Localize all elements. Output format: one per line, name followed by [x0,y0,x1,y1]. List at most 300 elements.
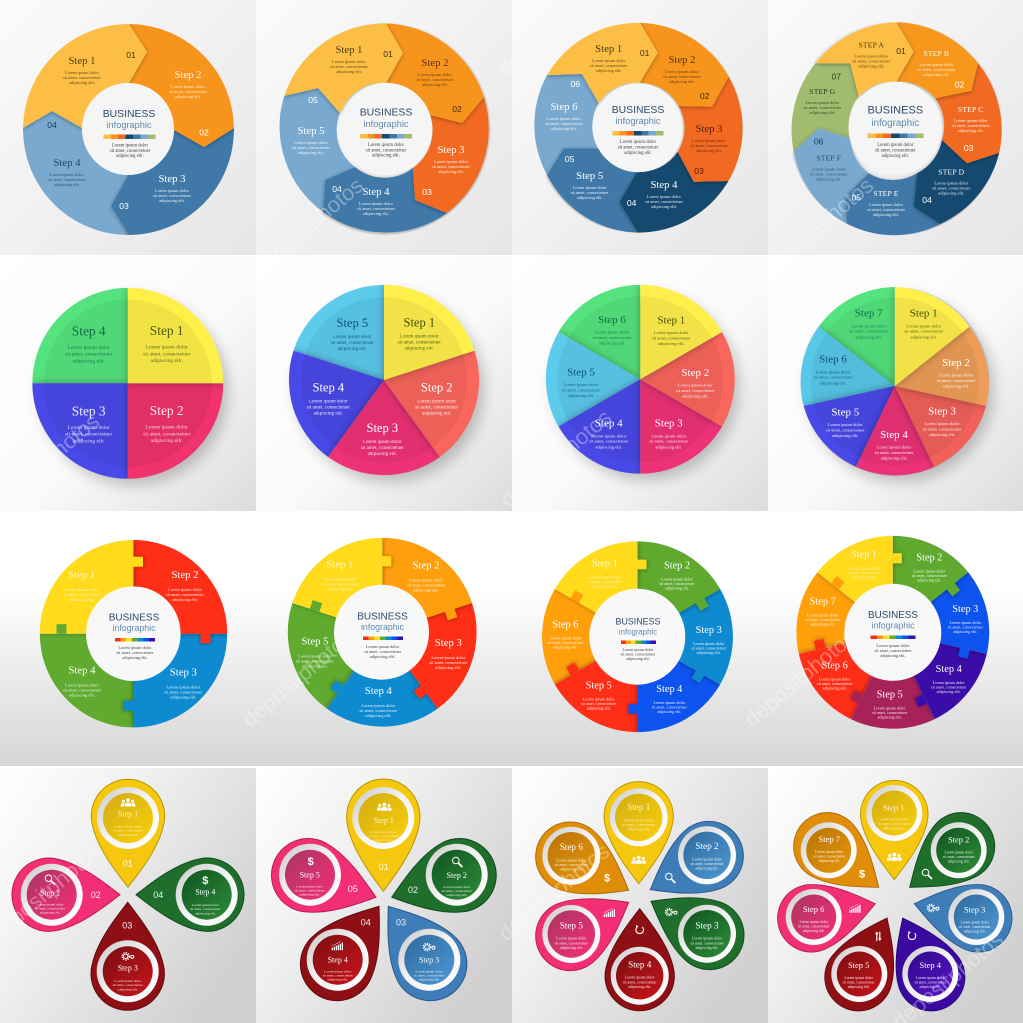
ring [611,947,669,1005]
step 1 label: Step 1 [335,44,363,56]
pin body [359,885,481,1015]
panel: wheel with four arrow steps [0,0,256,255]
step text: Lorem ipsum dolor [192,903,220,907]
petal: step 1 [861,780,928,880]
step text [35,888,66,914]
step 4 label: sit amet, consectetuer [645,199,683,205]
segment: step C [935,63,1002,163]
step 5 label [331,316,374,352]
step 2 label [166,569,204,602]
center text [116,645,154,660]
step 4 label [63,664,101,697]
icon: people [121,798,135,806]
step 1 label: Step 1 [403,316,435,330]
pin body [380,829,506,932]
center subheading: infographic [361,622,405,632]
step 1 label: Lorem ipsum dolor [332,59,366,64]
step text: Step 4 [920,960,942,970]
step 1 label [143,323,191,364]
step text [690,841,724,871]
step 7 label: sit amet, consectetuer [805,617,841,623]
step 5 label: sit amet, consectetuer [571,190,609,196]
piece: step 3 [638,589,762,708]
step text: Lorem ipsum dolor [879,818,909,822]
petal: step 3 [907,871,1019,959]
inner shade [811,298,979,466]
step 1 label [904,308,944,339]
step 2 label: Lorem ipsum dolor [665,69,699,74]
step text: Step 6 [560,842,583,852]
step 6 label: adipiscing elit. [599,341,625,346]
step 2 label: adipiscing elit. [413,588,439,593]
step 1 label: Lorem ipsum dolor [848,565,880,570]
center text: sit amet, consectetuer [874,648,912,654]
inner shade [301,297,467,463]
step 2 label: adipiscing elit. [665,586,689,591]
step 2 label [407,560,445,593]
step 1 label: Lorem ipsum dolor [589,574,621,579]
step 6 label: sit amet, consectetuer [814,375,853,381]
ring [542,905,600,963]
step text [369,816,400,842]
step 3 label [429,637,468,670]
step 1 label: Step 1 [595,43,622,55]
segment: step G [792,63,859,152]
step 4 label: Step 4 [53,157,81,169]
disc [103,793,153,843]
pin body [347,779,420,891]
step E label: sit amet, consectetuer [867,207,905,213]
step 4 label [875,429,914,461]
step 2 label: adipiscing elit. [422,412,451,417]
sector: step 3 [32,383,128,479]
sector: step 6 [558,261,681,379]
panel background [0,0,256,255]
step text: adipiscing elit. [373,838,394,842]
step text: sit amet, consectetuer [843,980,875,986]
step 1 label: adipiscing elit. [405,347,434,352]
step text: Lorem ipsum dolor [916,976,945,980]
step text: Step 3 [118,964,138,973]
step D label: sit amet, consectetuer [932,186,971,192]
petal: step 4 [605,909,674,1011]
ring [866,785,922,841]
piece: step 6 [783,600,893,719]
step 6 label: Step 6 [819,354,847,366]
step text [113,809,144,837]
step text: sit amet, consectetuer [35,906,66,911]
segment: step E [845,173,940,235]
step C label: sit amet, consectetuer [952,123,990,129]
panel: petal pins with five steps [256,768,512,1023]
step 3 label: Step 3 [952,604,978,615]
step 5 label [562,366,601,398]
step 6 label: adipiscing elit. [820,380,846,385]
step B label: adipiscing elit. [923,72,949,77]
disc [954,894,999,940]
step text: sit amet, consectetuer [622,823,656,828]
step A label: STEP A [858,41,884,50]
step text: Lorem ipsum dolor [844,976,874,980]
segment: step 1 [547,23,658,103]
step 4 label [357,186,395,216]
step text [959,904,991,933]
step 6 label [814,354,853,385]
piece: step 3 [382,603,500,718]
step 4 label: Step 4 [650,179,678,191]
step 6 label: Lorem ipsum dolor [816,369,851,374]
puzzle ring pieces [40,540,227,728]
step text: sit amet, consectetuer [414,973,445,978]
step text: Lorem ipsum dolor [624,818,654,822]
numbers: 03 [964,143,974,153]
step 6 label: Step 6 [822,661,848,672]
pin body [907,871,1019,959]
step 6 label [817,661,853,691]
step 2 label [912,552,948,582]
pie shadow [553,294,739,480]
step 1 label: sit amet, consectetuer [321,581,359,587]
step text: sit amet, consectetuer [554,863,589,868]
sector: step 5 [804,386,895,467]
center text: adipiscing elit. [372,154,400,158]
step 1 label: sit amet, consectetuer [590,63,628,69]
step text: sit amet, consectetuer [878,822,910,827]
panel: wheel with seven arrow steps [768,0,1023,255]
piece: step 3 [893,572,1015,691]
center text [110,144,151,159]
step text: Lorem ipsum dolor [415,969,443,973]
step 2 label: sit amet, consectetuer [663,74,701,80]
step 7 label: adipiscing elit. [855,334,882,339]
step 2 label [143,403,191,444]
step 7 label: Step 7 [855,308,883,320]
number: 02 [408,885,418,895]
step 6 label: Lorem ipsum dolor [819,677,851,682]
step 1 label: sit amet, consectetuer [652,335,691,341]
step 2 label: Step 2 [681,367,709,379]
step text: Lorem ipsum dolor [114,824,142,828]
step text: Step 1 [883,803,904,813]
step 3 label: Lorem ipsum dolor [166,684,201,689]
step text [295,870,326,896]
icon: chart [604,908,615,917]
icon: magnifier [45,875,55,885]
step 5 label: sit amet, consectetuer [872,710,908,716]
step 4 label: adipiscing elit. [314,412,343,417]
step 7 label: Step 7 [810,597,836,608]
piece: step 2 [382,538,472,632]
step 2 label: Lorem ipsum dolor [913,568,946,573]
step 4 label: adipiscing elit. [54,182,80,187]
step 4 label [589,418,629,449]
step 4 label: Lorem ipsum dolor [933,680,965,685]
piece: step 2 [638,541,720,637]
step 3 label: sit amet, consectetuer [65,432,113,438]
sector: step 5 [518,308,640,427]
step G label: STEP G [809,87,836,96]
step 3 label: Step 3 [437,144,465,156]
step 3 label: Step 3 [366,421,398,435]
ring [542,827,600,885]
step 7 label [849,308,889,339]
panel background [512,0,768,255]
pin body [780,799,900,914]
step C label: Lorem ipsum dolor [954,118,988,123]
step 4 label: sit amet, consectetuer [307,406,350,411]
step 5 label: Step 5 [576,170,603,182]
center text: adipiscing elit. [116,154,144,159]
ring [97,940,159,1002]
step 3 label [361,421,404,457]
step 6 label: Step 6 [550,101,578,113]
sector: step 1 [640,285,722,379]
step B label: sit amet, consectetuer [917,67,956,73]
step text: Step 4 [195,888,215,897]
petal: step 4 [286,885,409,1015]
pin body [12,858,120,931]
step 3 label: adipiscing elit. [435,665,461,670]
disc [683,832,731,879]
piece: step 1 [292,517,410,632]
step 2 label: Lorem ipsum dolor [171,84,205,89]
step 3 label [690,123,728,153]
step 3 label: Step 3 [695,123,723,135]
step 3 label: Step 3 [72,403,106,418]
step 2 label: sit amet, consectetuer [143,431,191,437]
step 3 label: Lorem ipsum dolor [949,620,982,625]
step text: Lorem ipsum dolor [370,830,398,834]
step 4 label: Lorem ipsum dolor [359,201,393,206]
numbers: 06 [571,79,580,89]
step 1 label [652,314,691,346]
step text: Step 3 [964,904,985,914]
pie shadow [296,294,484,482]
step 3 label: Step 3 [655,418,683,430]
step 6 label: adipiscing elit. [551,126,577,131]
segment: step 4 [23,111,129,235]
step 4 label: Lorem ipsum dolor [67,345,110,351]
step text: adipiscing elit. [628,985,651,989]
number: 02 [91,890,101,900]
step 1 label: sit amet, consectetuer [63,75,101,81]
step 4 label: Lorem ipsum dolor [591,433,627,438]
step 3 label: sit amet, consectetuer [649,439,689,445]
numbers: 01 [126,50,136,60]
step 1 label: adipiscing elit. [596,68,622,73]
center circle [589,589,685,685]
step 2 label: Lorem ipsum dolor [418,72,452,77]
step 3 label [164,666,203,699]
step 1 label: sit amet, consectetuer [63,592,101,598]
step 5 label: adipiscing elit. [338,347,367,352]
center circle [82,83,174,175]
segment: step 5 [547,148,638,233]
sector: step 4 [255,327,384,457]
disc [936,828,981,873]
panel: puzzle ring with four steps [0,512,256,766]
step text: adipiscing elit. [948,860,970,864]
step 3 label [65,403,113,444]
step 6 label [545,101,583,131]
disc [103,946,153,996]
numbers: 02 [700,91,710,101]
step 5 label [872,689,908,719]
step 5 label: adipiscing elit. [568,393,594,398]
piece: step 2 [893,536,968,632]
petal: step 4 [136,858,244,931]
petal: step 7 [780,799,900,914]
step 2 label: Step 2 [150,403,184,418]
pin body [605,909,674,1011]
step 3 label: Lorem ipsum dolor [363,440,402,445]
center heading: BUSINESS [360,108,412,118]
step 2 label: adipiscing elit. [943,384,969,389]
numbers [814,46,974,205]
center subheading: infographic [871,118,919,129]
step 6 label: Lorem ipsum dolor [547,116,581,121]
segment: step F [794,128,869,225]
ring [678,905,736,963]
step text: adipiscing elit. [848,985,870,989]
step 5 label: sit amet, consectetuer [826,427,865,433]
puzzle ring pieces [254,517,500,761]
step text: Lorem ipsum dolor [556,937,587,941]
tab: step 6 [571,590,584,603]
petal: step 2 [633,809,756,920]
ring [97,787,159,849]
step 7 label [805,597,841,627]
wheel segments [23,24,234,235]
step 5 label: Step 5 [297,125,325,137]
step text: sit amet, consectetuer [113,829,144,834]
numbers [565,48,710,208]
tab: step 7 [831,576,844,589]
step 5 label [571,170,609,200]
step text: adipiscing elit. [883,827,905,831]
step text: sit amet, consectetuer [113,983,144,988]
step F label: STEP F [816,154,841,163]
petal: step 5 [262,829,387,932]
center text [621,647,656,661]
step text: Lorem ipsum dolor [692,857,723,861]
segment: step A [815,22,914,97]
step 4 label: Lorem ipsum dolor [309,400,348,405]
step text: Step 1 [627,802,651,812]
step 1 label: Step 1 [68,569,95,581]
step 1 label: adipiscing elit. [910,334,937,339]
number: 04 [153,890,163,900]
step A label: Lorem ipsum dolor [854,54,889,59]
step text: sit amet, consectetuer [623,980,657,985]
step 6 label: Lorem ipsum dolor [595,330,630,335]
disc [806,828,851,873]
step text: adipiscing elit. [446,893,467,897]
center text: adipiscing elit. [624,151,652,156]
step 6 label: Step 6 [598,314,626,326]
step E label: adipiscing elit. [873,212,899,217]
ring [678,826,736,884]
step 3 label [649,418,689,449]
step text: adipiscing elit. [195,911,216,915]
step 7 label: Lorem ipsum dolor [807,613,839,618]
step 4 label [931,664,967,694]
segment: step 1 [284,23,403,113]
step 2 label: sit amet, consectetuer [407,583,445,589]
number: 04 [361,918,371,928]
step 3 label: Step 3 [435,637,462,649]
step 1 label: adipiscing elit. [69,80,95,85]
segment: step 6 [534,74,599,175]
step text [190,888,221,915]
step 6 label: Step 6 [552,619,578,630]
step 1 label: sit amet, consectetuer [587,579,623,585]
step 5 label [581,681,617,711]
center text: sit amet, consectetuer [116,650,154,656]
step 2 label [937,357,976,389]
step 3 label: adipiscing elit. [368,452,397,457]
disc [404,935,454,985]
piece: step 4 [309,632,438,761]
step text: Step 3 [695,920,719,930]
step 2 label: Lorem ipsum dolor [168,587,202,592]
numbers: 01 [896,46,906,56]
step 4 label: adipiscing elit. [365,713,391,718]
step 4 label: adipiscing elit. [651,204,677,209]
panel: wheel with five arrow steps [256,0,512,255]
step text: adipiscing elit. [299,892,320,896]
segment: step 4 [619,152,729,233]
icon: magnifier [452,857,462,867]
segment: step 3 [678,77,743,182]
step 5 label: Lorem ipsum dolor [298,654,332,659]
piece: step 4 [40,634,134,728]
sector: step 4 [558,379,640,474]
step 2 label: sit amet, consectetuer [659,581,695,587]
icon: gears [927,904,939,912]
step 1 label: adipiscing elit. [336,69,362,74]
step 4 label [65,323,113,364]
step 2 label: Step 2 [942,357,970,369]
pie sectors [288,284,480,476]
step text [554,920,589,950]
center text [364,644,402,659]
numbers: 02 [199,128,209,138]
sector: step 2 [128,383,223,479]
center text: sit amet, consectetuer [366,148,407,154]
step text: Lorem ipsum dolor [960,920,990,924]
segment: step D [914,140,999,224]
step text: adipiscing elit. [818,859,840,863]
center text: adipiscing elit. [881,154,909,159]
step 4 label: Step 4 [880,429,908,441]
step 2 label: Lorem ipsum dolor [145,425,188,431]
panel: petal pins with six steps [512,768,768,1023]
step 3 label: sit amet, consectetuer [361,446,404,451]
step 3 label: adipiscing elit. [73,438,106,444]
petal: step 3 [359,885,481,1015]
center heading: BUSINESS [109,612,160,623]
center subheading: infographic [619,627,657,636]
petal: step 1 [91,779,165,887]
step 4 label: adipiscing elit. [69,692,95,697]
watermark text: depositphotos [247,173,368,280]
numbers [47,50,209,211]
step 2 label [169,69,207,99]
step text: adipiscing elit. [560,946,583,950]
pin body [771,871,883,959]
center circle [340,83,432,175]
